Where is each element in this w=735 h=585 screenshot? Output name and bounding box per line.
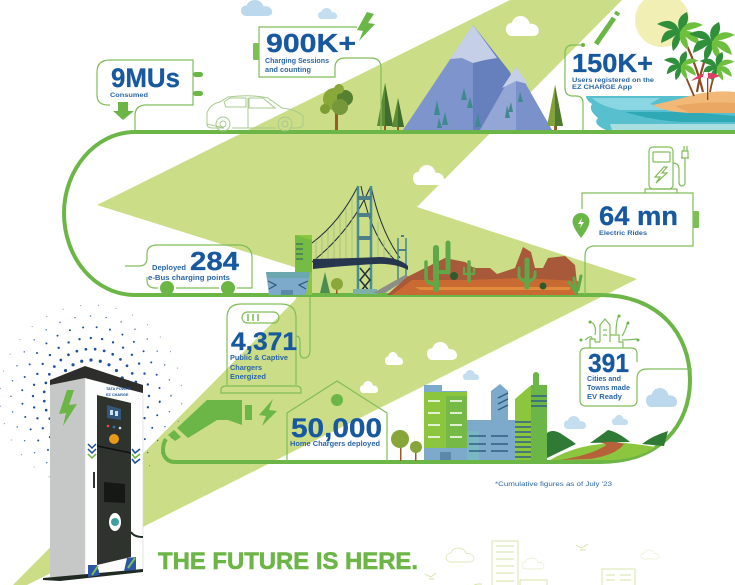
stat: 900K+ charging sessions bbox=[253, 12, 381, 130]
stat: 284 e-bus charging points: e-Bus charging points bbox=[148, 275, 230, 282]
stat: 900K+ charging sessions: Charging Sessions bbox=[265, 58, 329, 65]
stat: 391 cities ev ready bbox=[580, 348, 692, 406]
road bbox=[64, 132, 735, 462]
stat: 9MUs consumed: Consumed bbox=[110, 92, 148, 99]
stat: 900K+ charging sessions: 900K+ bbox=[266, 28, 356, 58]
clouds bbox=[241, 0, 677, 429]
stat: 391 cities ev ready: EV Ready bbox=[587, 394, 622, 401]
EV charger: EZ CHARGE bbox=[106, 393, 129, 397]
stat: 391 cities ev ready: Towns made bbox=[587, 385, 630, 392]
stat: 4,371 public and captive chargers bbox=[221, 297, 310, 393]
stat: 4,371 public and captive chargers: Energized bbox=[230, 372, 266, 381]
stat: 150K+ app users: EZ CHARGE App bbox=[572, 84, 632, 91]
stat: 284 e-bus charging points: Deployed bbox=[152, 265, 186, 272]
stat: 150K+ app users bbox=[565, 12, 654, 130]
dotted halo bbox=[0, 297, 190, 495]
stat: 4,371 public and captive chargers: 4,371 bbox=[231, 328, 297, 356]
bridge bbox=[312, 186, 410, 294]
stat: 391 cities ev ready: 391 bbox=[588, 348, 629, 378]
stat: 64mn electric rides: Electric Rides bbox=[599, 230, 647, 237]
building by the bridge bbox=[266, 235, 312, 295]
EV charger bbox=[43, 366, 143, 581]
stat: 9MUs consumed: 9MUs bbox=[111, 63, 180, 93]
small trees by the bridge bbox=[320, 272, 343, 294]
stat: 50,000 home chargers: 50,000 bbox=[291, 413, 382, 443]
icon: fuel pump charger bbox=[645, 146, 689, 193]
trees on top road bbox=[320, 83, 563, 131]
stat: 150K+ app users: Users registered on the bbox=[572, 77, 654, 84]
stat: 284 e-bus charging points: 284 bbox=[190, 246, 240, 276]
stat: 9MUs consumed bbox=[97, 60, 203, 130]
icon: charging plug bbox=[168, 399, 277, 441]
stat: 64mn electric rides bbox=[572, 193, 699, 295]
trees by the city bbox=[391, 430, 422, 461]
stat: 284 e-bus charging points bbox=[125, 245, 252, 295]
stat: 391 cities ev ready: Cities and bbox=[587, 376, 621, 383]
heading: THE FUTURE IS HERE. bbox=[158, 548, 418, 575]
stat: 4,371 public and captive chargers: Public & Captive bbox=[230, 353, 288, 362]
stat: 4,371 public and captive chargers: Chargers bbox=[230, 363, 262, 372]
sea and island bbox=[586, 91, 735, 130]
EV charger: TATA POWER bbox=[106, 387, 131, 391]
stat: 50,000 home chargers: Home Chargers deployed bbox=[290, 439, 380, 448]
car outline bbox=[207, 96, 303, 131]
icon: connected city bbox=[580, 314, 640, 348]
mountains bbox=[403, 25, 552, 130]
stat: 900K+ charging sessions: and counting bbox=[265, 67, 311, 74]
city buildings bbox=[424, 372, 547, 460]
park hills with path bbox=[547, 430, 668, 460]
bottom line art skyline bbox=[425, 541, 659, 585]
stat: 150K+ app users: 150K+ bbox=[572, 48, 653, 78]
stat: 64mn electric rides: 64 mn bbox=[599, 201, 678, 231]
stat: 50,000 home chargers bbox=[287, 381, 387, 462]
palm trees and umbrella bbox=[657, 12, 735, 100]
footnote: *Cumulative figures as of July '23 bbox=[495, 481, 612, 488]
sun bbox=[635, 0, 689, 47]
desert with cacti bbox=[387, 243, 581, 295]
